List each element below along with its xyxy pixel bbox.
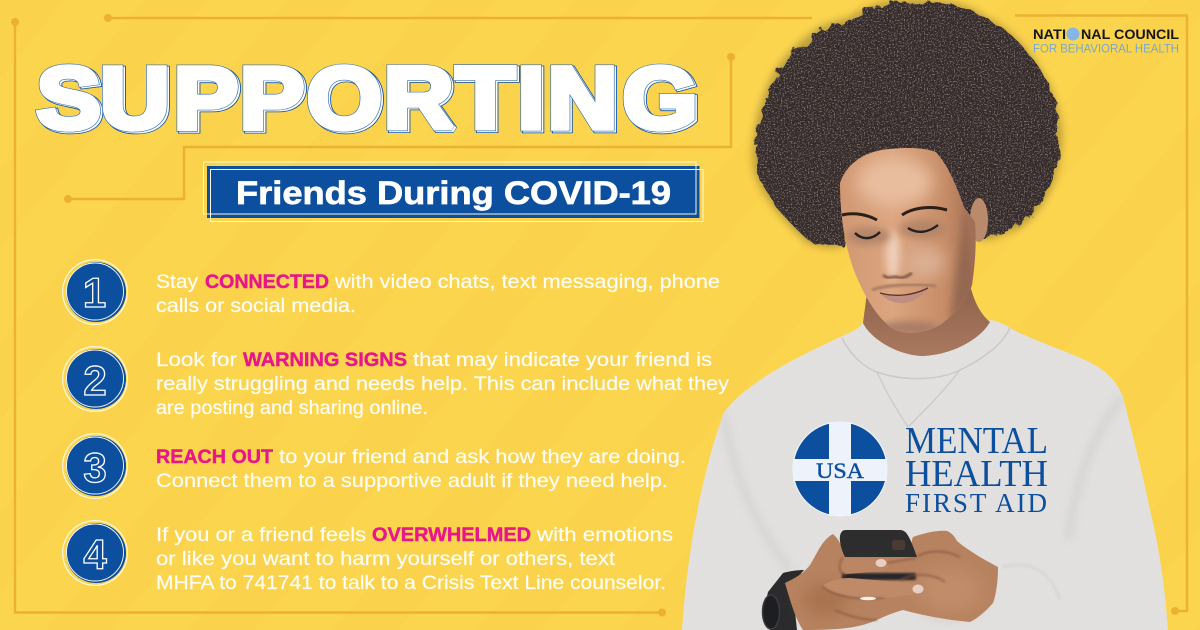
National Council logo: NATI (1033, 26, 1066, 42)
logo circle: USA (816, 458, 864, 483)
logo wordmark (905, 420, 1048, 518)
step 4 badge: 4 (83, 531, 107, 578)
step 2 text: WARNING SIGNS (243, 349, 407, 371)
step 2 text: are posting and sharing online. (156, 397, 428, 419)
step 4 text: OVERWHELMED (372, 524, 531, 546)
sweatshirt shading (724, 422, 786, 564)
logo circle (793, 422, 887, 516)
face (840, 148, 976, 333)
step 3 text (156, 446, 686, 492)
eyes (855, 225, 938, 238)
step 3 badge: 3 (83, 444, 107, 491)
step 1 text: with video chats, text messaging, phone (334, 271, 720, 293)
mustache shadow (872, 285, 936, 290)
step 2 badge (62, 346, 128, 412)
step 1 badge: 1 (83, 269, 106, 316)
National Council logo (1033, 26, 1179, 56)
National Council logo: NAL COUNCIL (1081, 26, 1179, 42)
upper finger (839, 557, 889, 574)
eyebrows (842, 208, 947, 220)
subtitle banner (204, 162, 703, 222)
step 1 text (156, 271, 720, 317)
title: SUPPORTING: SUPPORTING (37, 50, 698, 147)
watch (762, 570, 804, 630)
step 1 text: calls or social media. (156, 295, 356, 317)
step 1 text: CONNECTED (205, 271, 329, 293)
step 4 text: MHFA to 741741 to talk to a Crisis Text Line counselor. (156, 572, 666, 594)
logo wordmark: FIRST AID (905, 488, 1047, 518)
step 2 text (156, 349, 729, 419)
hair halo (753, 0, 1062, 248)
step 4 text (156, 524, 673, 594)
step 2 text: Look for (156, 349, 238, 371)
lower finger (822, 578, 924, 598)
subtitle banner: Friends During COVID-19 (236, 175, 671, 211)
step 2 badge: 2 (83, 357, 107, 404)
phone (840, 530, 917, 557)
title: SUPPORTING: SUPPORTING (39, 52, 700, 148)
mouth (880, 288, 928, 303)
step 3 badge (62, 433, 128, 499)
step 2 text: that may indicate your friend is (413, 349, 712, 371)
neck (863, 240, 990, 356)
hands (785, 531, 998, 630)
step 3 text: to your friend and ask how they are doing. (279, 446, 686, 468)
phone lower edge under fingers (842, 573, 916, 580)
step 4 text: If you or a friend feels (156, 524, 366, 546)
logo wordmark: HEALTH (905, 453, 1048, 495)
step 1 badge (62, 259, 128, 325)
step 4 badge (62, 520, 128, 586)
step 3 text: Connect them to a supportive adult if they need help. (156, 470, 668, 492)
logo wordmark: MENTAL (905, 420, 1048, 462)
step 4 text: with emotions (536, 524, 673, 546)
finger creases (822, 551, 960, 620)
step 2 text: really struggling and needs help. This can include what they (156, 373, 729, 395)
step 3 text: REACH OUT (156, 446, 273, 468)
title: SUPPORTING: SUPPORTING (39, 52, 700, 148)
step 1 text: Stay (156, 271, 198, 293)
ear (970, 198, 988, 242)
sweatshirt (682, 320, 1168, 630)
title: SUPPORTING: SUPPORTING (37, 50, 698, 147)
hair (756, 2, 1060, 246)
step 4 text: or like you want to harm yourself or others, text (156, 548, 616, 570)
National Council logo: FOR BEHAVIORAL HEALTH (1033, 44, 1179, 56)
nose (883, 273, 912, 278)
photo: young man with phone (682, 0, 1168, 630)
